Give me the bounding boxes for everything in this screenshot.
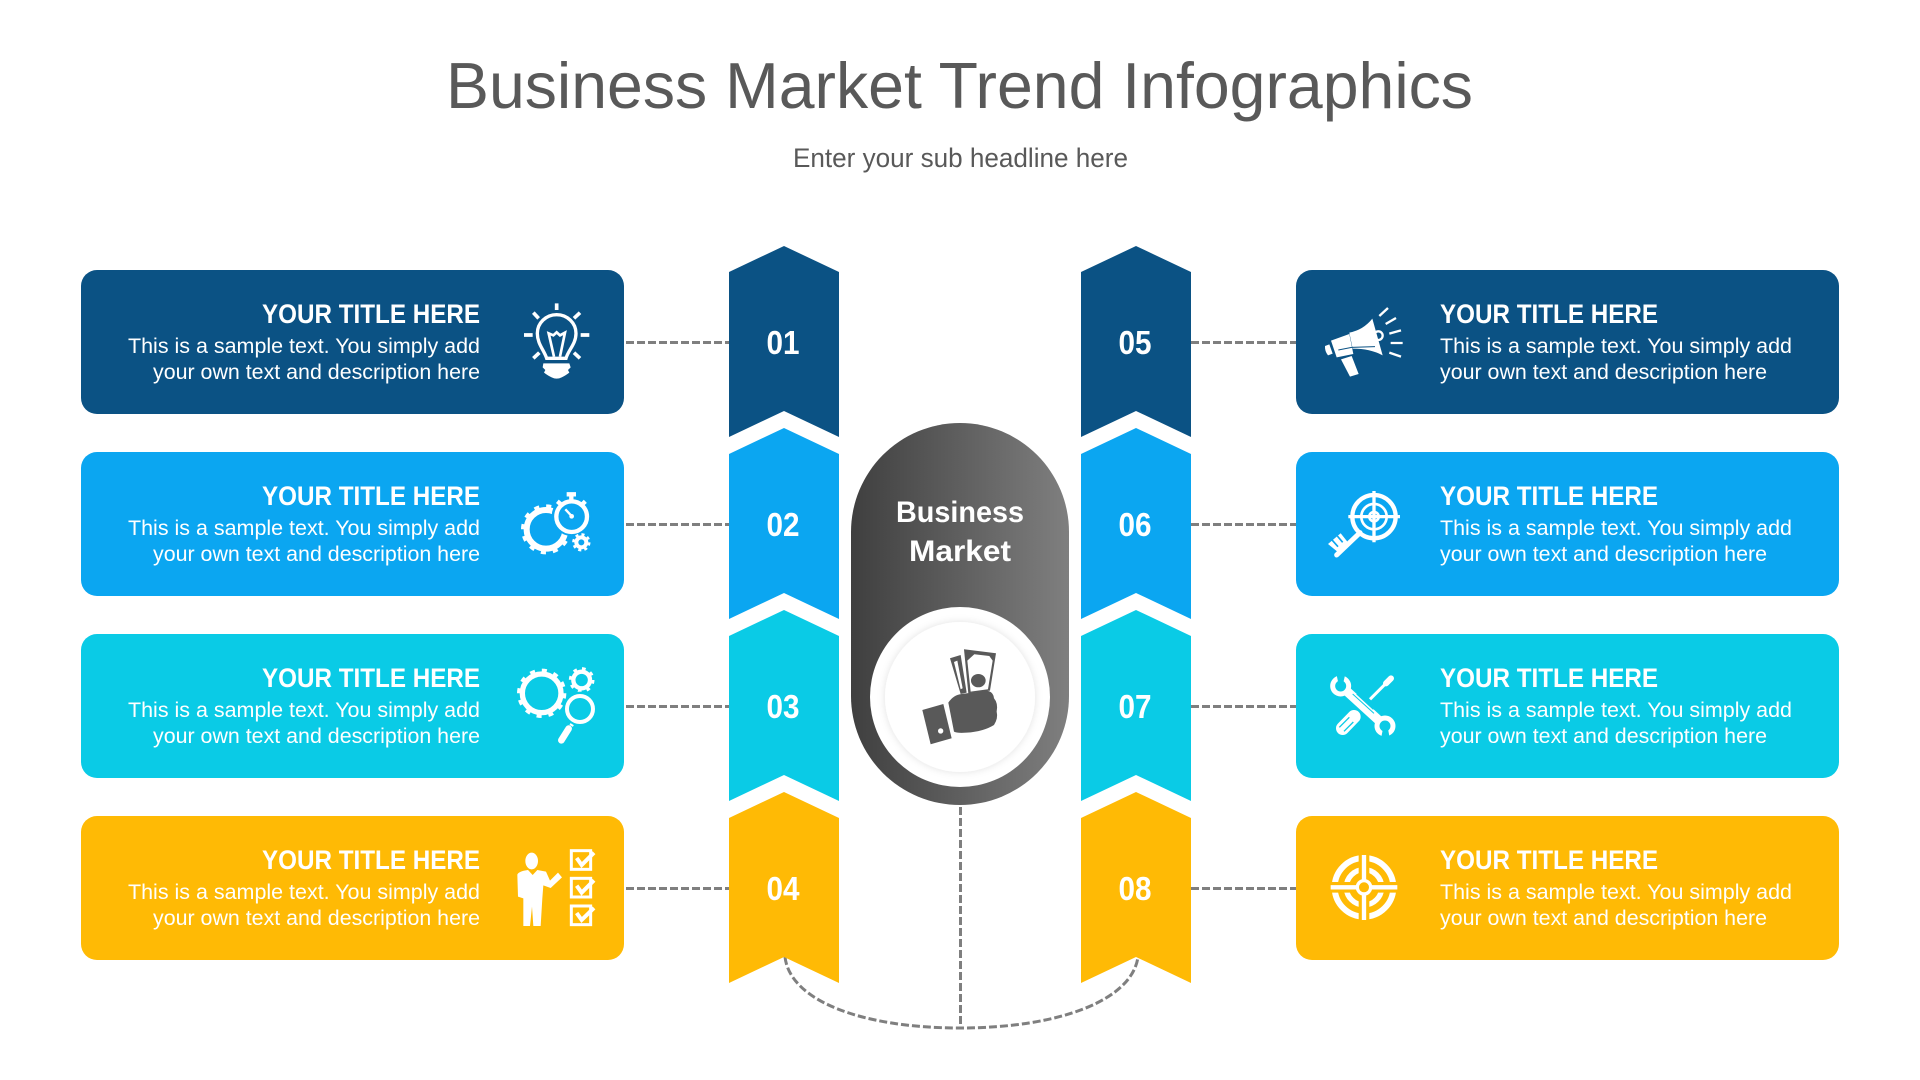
card description: your own text and description here bbox=[1440, 360, 1767, 384]
panel: item 02 bbox=[81, 428, 839, 619]
card description: This is a sample text. You simply add bbox=[1440, 516, 1792, 540]
icon: crosshair target bbox=[1328, 852, 1400, 923]
center heading: Business bbox=[896, 496, 1024, 529]
panel: item 01 bbox=[81, 246, 839, 437]
ribbon 08: 08 bbox=[1118, 870, 1152, 907]
panel: item 03 bbox=[81, 610, 839, 801]
card description bbox=[128, 334, 480, 384]
card description bbox=[1440, 516, 1792, 566]
panel: central pill bbox=[851, 423, 1069, 805]
ribbon 08 bbox=[1081, 792, 1191, 983]
icon: gears and magnifier bbox=[519, 669, 597, 740]
card description: your own text and description here bbox=[153, 724, 480, 748]
card background bbox=[81, 270, 624, 414]
icon: megaphone bbox=[1325, 308, 1403, 377]
card description bbox=[128, 698, 480, 748]
card title: YOUR TITLE HERE bbox=[262, 481, 480, 511]
card description bbox=[1440, 698, 1792, 748]
card background bbox=[1296, 634, 1839, 778]
icon: gears and stopwatch bbox=[523, 494, 592, 552]
ribbon 04 bbox=[729, 792, 839, 983]
card title: YOUR TITLE HERE bbox=[262, 845, 480, 875]
panel: item 04 bbox=[81, 792, 839, 983]
card description: This is a sample text. You simply add bbox=[1440, 880, 1792, 904]
ribbon 01: 01 bbox=[766, 324, 800, 361]
card title: YOUR TITLE HERE bbox=[1440, 663, 1658, 693]
card description: This is a sample text. You simply add bbox=[128, 516, 480, 540]
white circle bbox=[870, 607, 1050, 787]
card title: YOUR TITLE HERE bbox=[1440, 481, 1658, 511]
card description: This is a sample text. You simply add bbox=[128, 698, 480, 722]
pill background bbox=[851, 423, 1069, 805]
card description: your own text and description here bbox=[153, 542, 480, 566]
card description: your own text and description here bbox=[1440, 906, 1767, 930]
card description: your own text and description here bbox=[1440, 724, 1767, 748]
connector bbox=[1191, 341, 1296, 344]
ribbon 07 bbox=[1081, 610, 1191, 801]
card description bbox=[1440, 334, 1792, 384]
panel: item 05 bbox=[1081, 246, 1839, 437]
card title: YOUR TITLE HERE bbox=[262, 299, 480, 329]
card description: This is a sample text. You simply add bbox=[128, 334, 480, 358]
connector bbox=[626, 523, 729, 526]
card description bbox=[1440, 880, 1792, 930]
card background bbox=[81, 452, 624, 596]
title: Business Market Trend Infographics bbox=[446, 49, 1473, 122]
icon: light bulb bbox=[524, 303, 589, 379]
card description: This is a sample text. You simply add bbox=[128, 880, 480, 904]
card title: YOUR TITLE HERE bbox=[1440, 299, 1658, 329]
connector bbox=[1191, 887, 1296, 890]
card description: your own text and description here bbox=[153, 906, 480, 930]
card title: YOUR TITLE HERE bbox=[1440, 845, 1658, 875]
ribbon 02 bbox=[729, 428, 839, 619]
icon: key and target bbox=[1328, 491, 1400, 555]
ribbon 07: 07 bbox=[1118, 688, 1152, 725]
connector: center to bottom arc bbox=[785, 807, 1138, 1028]
center heading bbox=[896, 496, 1024, 568]
connector bbox=[626, 341, 729, 344]
card background bbox=[81, 816, 624, 960]
connector bbox=[626, 887, 729, 890]
ribbon 01 bbox=[729, 246, 839, 437]
card description: your own text and description here bbox=[153, 360, 480, 384]
card background bbox=[1296, 816, 1839, 960]
card background bbox=[1296, 270, 1839, 414]
card background bbox=[81, 634, 624, 778]
icon: wrench and screwdriver bbox=[1333, 672, 1393, 741]
ribbon 04: 04 bbox=[766, 870, 800, 907]
ribbon 05: 05 bbox=[1118, 324, 1152, 361]
ribbon 03 bbox=[729, 610, 839, 801]
icon: presenter with checklist bbox=[517, 851, 594, 926]
ribbon 03: 03 bbox=[766, 688, 800, 725]
card description: your own text and description here bbox=[1440, 542, 1767, 566]
ribbon 06: 06 bbox=[1118, 506, 1152, 543]
connector bbox=[1191, 523, 1296, 526]
center heading: Market bbox=[909, 535, 1011, 568]
panel: item 07 bbox=[1081, 610, 1839, 801]
card description: This is a sample text. You simply add bbox=[1440, 698, 1792, 722]
card background bbox=[1296, 452, 1839, 596]
card description bbox=[128, 516, 480, 566]
panel: item 06 bbox=[1081, 428, 1839, 619]
card description: This is a sample text. You simply add bbox=[1440, 334, 1792, 358]
icon: hand holding money bbox=[922, 649, 997, 744]
ribbon 06 bbox=[1081, 428, 1191, 619]
subtitle: Enter your sub headline here bbox=[793, 143, 1128, 173]
panel: item 08 bbox=[1081, 792, 1839, 983]
ribbon 02: 02 bbox=[766, 506, 800, 543]
connector bbox=[1191, 705, 1296, 708]
card description bbox=[128, 880, 480, 930]
card title: YOUR TITLE HERE bbox=[262, 663, 480, 693]
connector bbox=[626, 705, 729, 708]
ribbon 05 bbox=[1081, 246, 1191, 437]
